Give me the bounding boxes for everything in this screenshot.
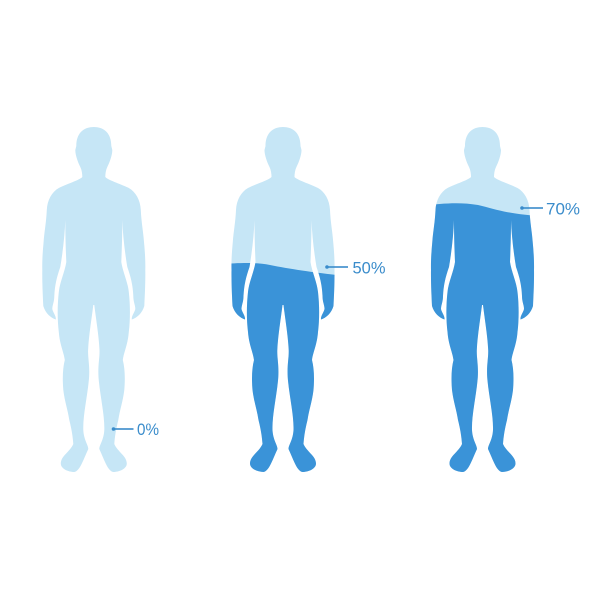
water fill 50%	[231, 263, 335, 472]
callout: 0%: 0%	[137, 420, 159, 439]
callout: 0%	[112, 420, 159, 439]
figure: 0% body	[42, 127, 145, 472]
callout: 70%	[520, 200, 580, 218]
callout: 70%: 70%	[546, 200, 580, 218]
callout: 50%: 50%	[352, 258, 386, 278]
water fill 70%	[430, 203, 534, 472]
callout: 50%	[325, 258, 386, 278]
figure: 70% body	[431, 127, 534, 472]
figure: 50% body	[231, 127, 335, 472]
